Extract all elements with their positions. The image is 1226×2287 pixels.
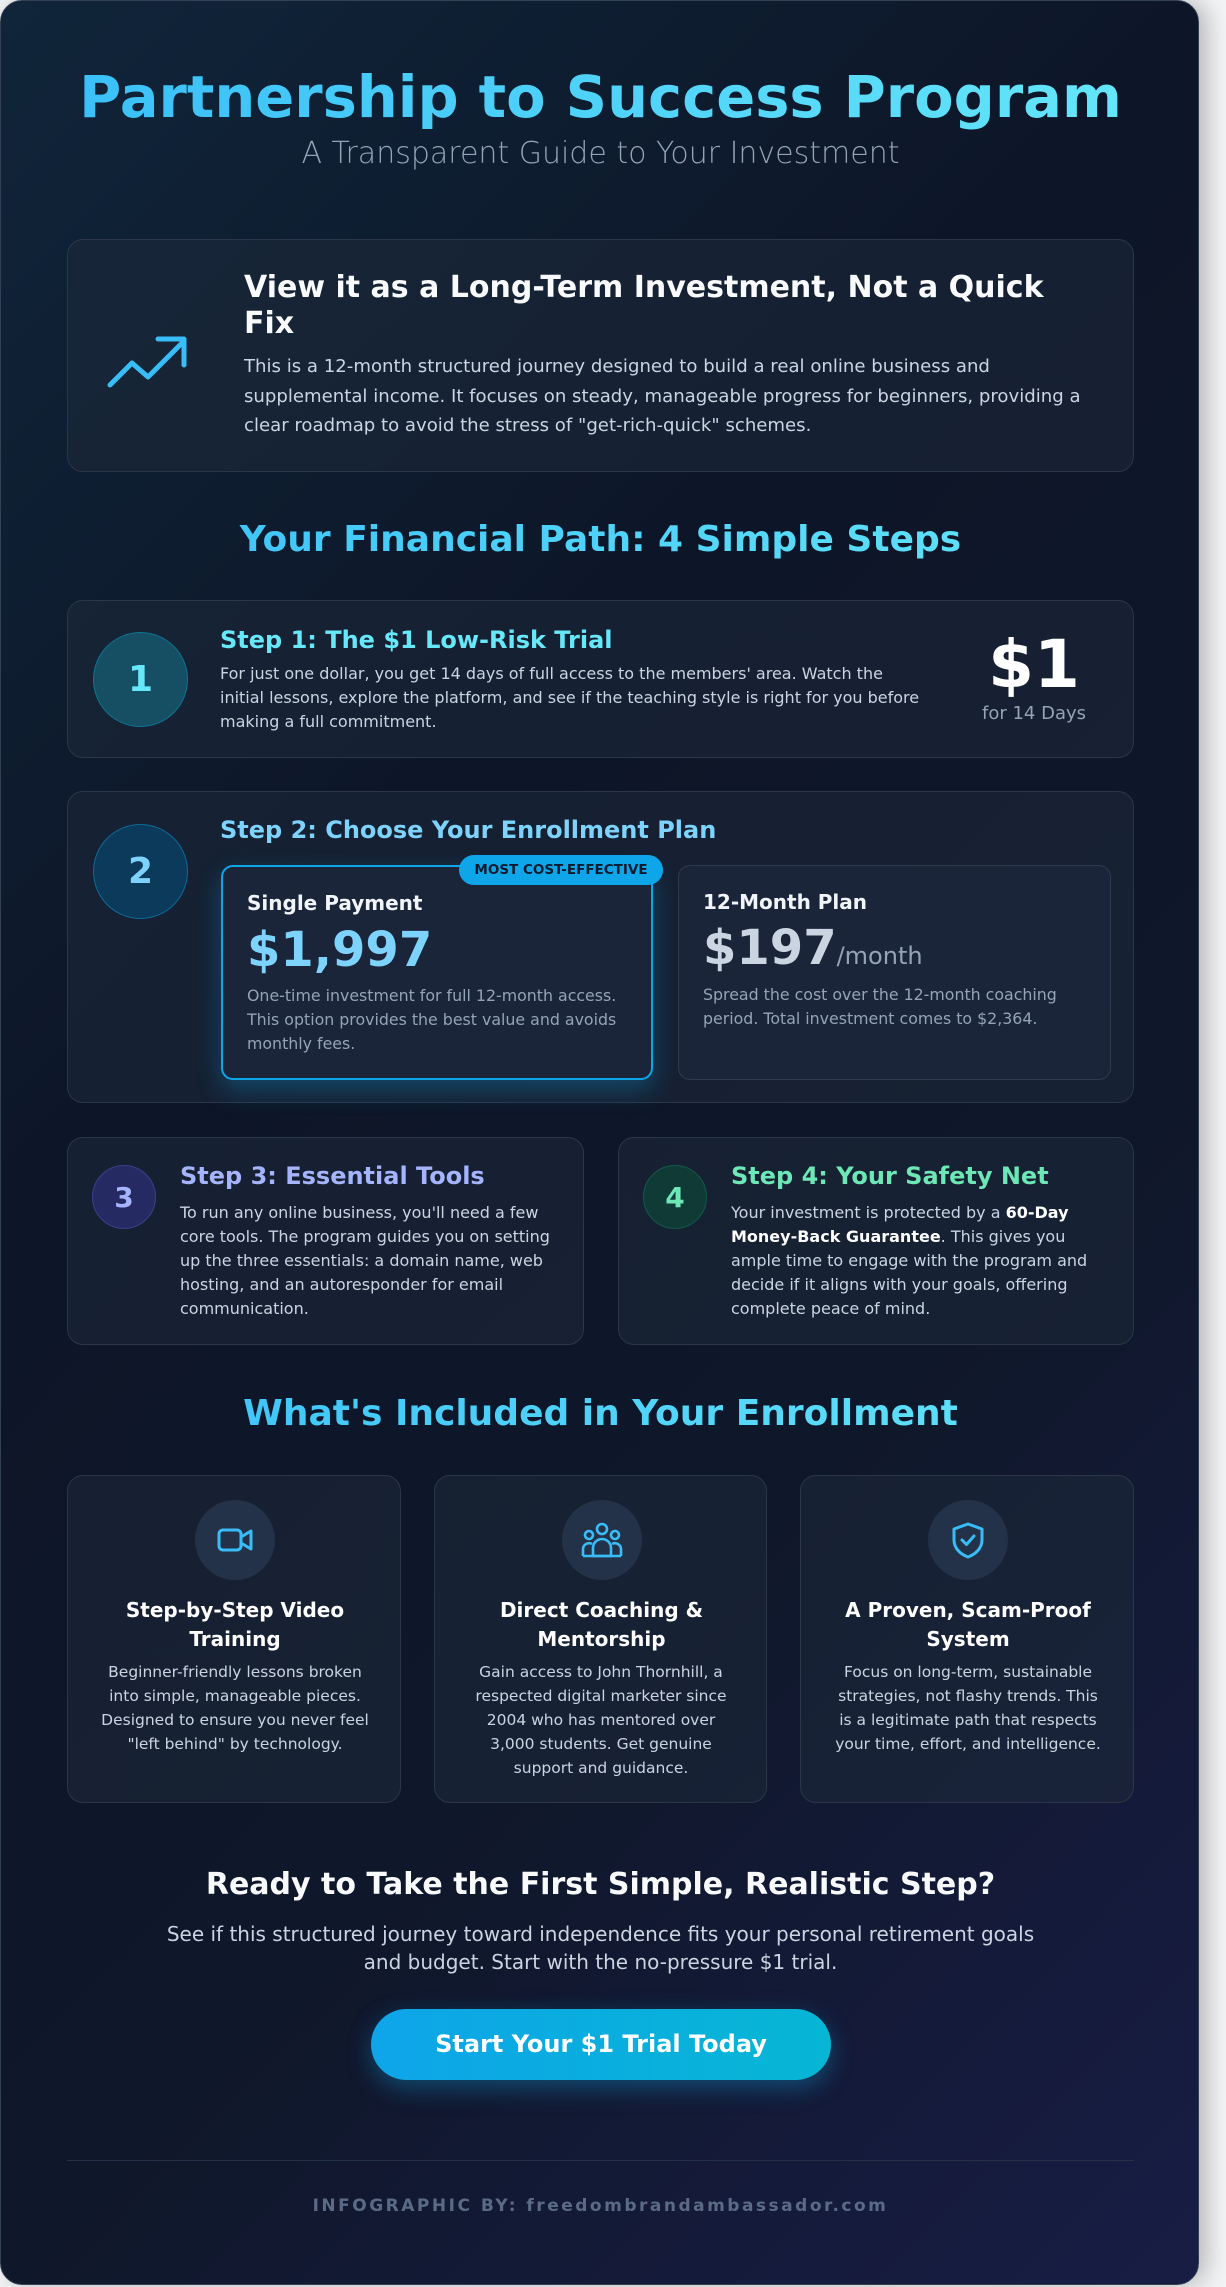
plan: 12-month: Spread the cost over the 12-month coaching period. Total investment comes to $2,364. xyxy=(703,985,1057,1028)
panel: step 4 xyxy=(618,1137,1134,1345)
plan: single payment: One-time investment for full 12-month access. This option provides the best value and avoids monthly fees. xyxy=(247,986,616,1053)
heading: financial path: Your Financial Path: 4 Simple Steps xyxy=(240,519,961,560)
panel: step 1 xyxy=(67,600,1134,758)
panel: video training: Step-by-Step Video Training xyxy=(126,1598,344,1651)
badge xyxy=(459,855,663,885)
price: $1 xyxy=(982,626,1086,724)
intro heading: View it as a Long-Term Investment, Not a Quick Fix xyxy=(244,270,1044,341)
step 3 title: Step 3: Essential Tools xyxy=(180,1162,485,1190)
icon: number 3: 3 xyxy=(114,1180,134,1214)
step 4 text: Your investment is protected by a 60-Day Money-Back Guarantee. This gives you ample time to engage with the program and decide if it aligns with your goals, offering complete peace of mind. xyxy=(731,1203,1087,1318)
panel: step 2 xyxy=(67,791,1134,1103)
intro text: This is a 12-month structured journey designed to build a real online business and supplemental income. It focuses on steady, manageable progress for beginners, providing a clear roadmap to avoid the stress of "get-rich-quick" schemes. xyxy=(244,356,1081,436)
icon: number 4 xyxy=(643,1165,707,1229)
plan: 12-month xyxy=(678,865,1111,1080)
step 3 text: To run any online business, you'll need a few core tools. The program guides you on setting up the three essentials: a domain name, web hosting, and an autoresponder for email communication. xyxy=(180,1203,550,1318)
panel: coaching: Direct Coaching & Mentorship xyxy=(500,1598,703,1651)
panel: coaching xyxy=(434,1475,767,1803)
panel: proven system: A Proven, Scam-Proof System xyxy=(845,1598,1091,1651)
price: $1: for 14 Days xyxy=(982,703,1086,724)
heading: what's included xyxy=(1,1391,1200,1437)
panel: step 3 xyxy=(67,1137,584,1345)
price: $1: $1 xyxy=(988,626,1080,703)
CTA heading: Ready to Take the First Simple, Realistic Step? xyxy=(206,1867,995,1902)
step 4 title: Step 4: Your Safety Net xyxy=(731,1162,1049,1190)
icon: number 3 xyxy=(92,1165,156,1229)
panel: proven system: Focus on long-term, sustainable strategies, not flashy trends. This is a legitimate path that respects your time, effort, and intelligence. xyxy=(835,1663,1101,1753)
icon: number 2: 2 xyxy=(128,851,153,892)
plan: single payment: Single Payment xyxy=(247,891,422,915)
heading: what's included: What's Included in Your Enrollment xyxy=(243,1393,958,1434)
icon: video xyxy=(195,1500,275,1580)
plan: 12-month: $197/month xyxy=(703,920,923,976)
plan: 12-month: 12-Month Plan xyxy=(703,890,867,914)
step 2 title: Step 2: Choose Your Enrollment Plan xyxy=(220,816,716,844)
CTA button xyxy=(371,2009,831,2080)
title: Partnership to Success Program xyxy=(79,64,1122,131)
panel: video training xyxy=(67,1475,401,1803)
subtitle: A Transparent Guide to Your Investment xyxy=(302,136,900,171)
icon: number 2 xyxy=(93,824,188,919)
heading: financial path xyxy=(1,517,1200,563)
panel: coaching: Gain access to John Thornhill, a respected digital marketer since 2004 who has mentored over 3,000 students. Get genuine support and guidance. xyxy=(475,1663,727,1777)
icon: number 1: 1 xyxy=(128,659,153,700)
icon: number 4: 4 xyxy=(665,1180,685,1214)
step 1 text: For just one dollar, you get 14 days of full access to the members' area. Watch the initial lessons, explore the platform, and see if the teaching style is right for you before making a full commitment. xyxy=(220,664,919,731)
icon: trending up xyxy=(108,336,186,388)
panel: long-term investment intro xyxy=(67,239,1134,472)
icon: shield check xyxy=(928,1500,1008,1580)
step 1 title: Step 1: The $1 Low-Risk Trial xyxy=(220,626,613,654)
footer credit: INFOGRAPHIC BY: freedombrandambassador.com xyxy=(313,2196,888,2216)
CTA button: Start Your $1 Trial Today xyxy=(435,2030,767,2058)
plan: single payment: $1,997 xyxy=(247,922,432,978)
badge: MOST COST-EFFECTIVE xyxy=(474,862,648,878)
CTA text: See if this structured journey toward independence fits your personal retirement goals and budget. Start with the no-pressure $1 trial. xyxy=(167,1922,1034,1974)
icon: number 1 xyxy=(93,632,188,727)
icon: users xyxy=(562,1500,642,1580)
panel: video training: Beginner-friendly lessons broken into simple, manageable pieces. Designed to ensure you never feel "left behind" by technology. xyxy=(101,1663,369,1753)
panel: proven system xyxy=(800,1475,1134,1803)
plan: single payment xyxy=(221,865,653,1080)
